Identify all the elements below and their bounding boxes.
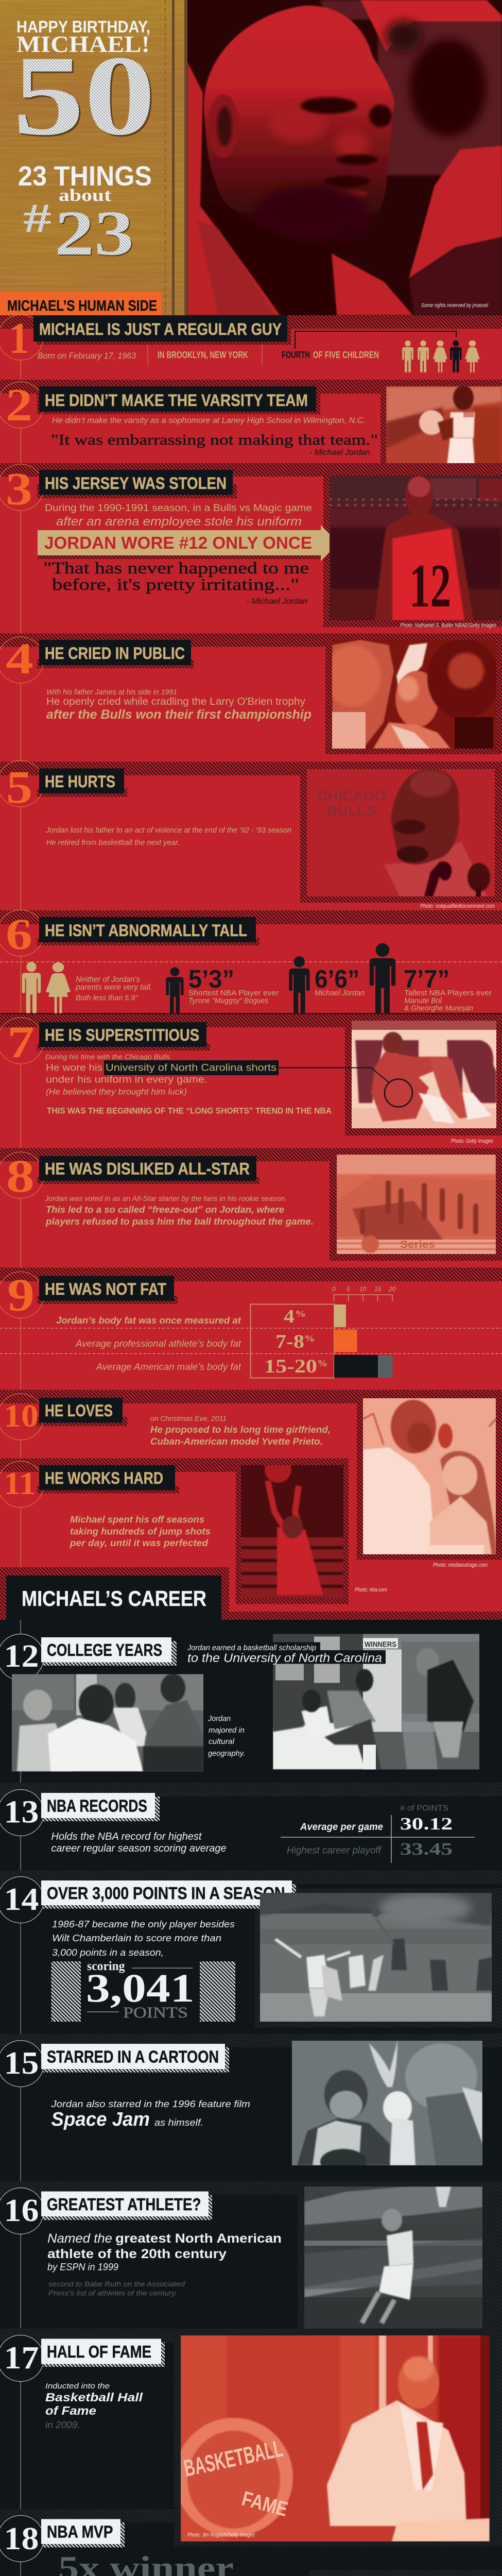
photo: Jordan in class xyxy=(12,1674,203,1771)
parents note: Both less than 5.9” xyxy=(76,993,138,1003)
number 15: 15 xyxy=(4,2046,39,2081)
height 6'6": Michael Jordan xyxy=(315,989,365,997)
title text: 50 xyxy=(13,32,155,159)
number 18: 18 xyxy=(4,2521,39,2556)
text: as himself. xyxy=(154,2117,203,2128)
photo: Jordan and Yvette Prieto xyxy=(363,1398,496,1554)
panel: fact 2 varsity xyxy=(0,380,502,467)
heading: GREATEST ATHLETE? xyxy=(47,2195,201,2214)
heading: HE WORKS HARD xyxy=(45,1469,163,1487)
background: red section xyxy=(0,309,502,1620)
panel: fact 4 cried xyxy=(0,634,502,754)
text: taking hundreds of jump shots xyxy=(70,1526,211,1536)
text: This led to a so called “freeze-out” on Jordan, where xyxy=(46,1205,284,1215)
photo: Jordan crying with trophy xyxy=(332,640,496,749)
panel: fact 13 records xyxy=(0,1783,502,1863)
title text: 50 xyxy=(14,34,157,161)
height 7'7": 7’7” xyxy=(404,965,449,993)
header xyxy=(0,0,502,315)
text: With his father James at his side in 1991 xyxy=(46,688,177,697)
birth facts: FOURTH xyxy=(282,350,310,360)
heading: HE DIDN’T MAKE THE VARSITY TEAM xyxy=(45,391,308,410)
text: second to Babe Ruth on the Associated xyxy=(48,2280,185,2288)
bar chart: body fat comparison: % xyxy=(317,1358,327,1368)
text: majored: geography. xyxy=(208,1749,245,1758)
text xyxy=(45,2382,143,2430)
title text: 23 xyxy=(56,199,135,269)
quote xyxy=(43,558,309,606)
number 1: 1 xyxy=(9,313,29,363)
heading: NBA MVP xyxy=(47,2522,113,2541)
panel: fact 15 cartoon xyxy=(0,2034,502,2175)
photo: Jordan at press conference: CHICAGO xyxy=(317,788,386,804)
text xyxy=(46,688,311,722)
heading xyxy=(39,386,316,412)
photo: Jordan at press conference xyxy=(307,769,495,896)
photo: Space Jam scene xyxy=(292,2041,482,2165)
panel: fact 9 body fat xyxy=(0,1267,502,1378)
bar chart: body fat comparison: Average American male’s body fat xyxy=(96,1362,241,1372)
text: career regular season scoring average xyxy=(51,1843,227,1854)
birth facts xyxy=(38,345,379,365)
panel: fact 17 hall of fame xyxy=(0,2329,502,2547)
text: of Fame xyxy=(45,2404,96,2417)
heading xyxy=(41,2519,125,2547)
heading xyxy=(41,1637,177,1666)
photo: Jordan hall of fame speech: BASKETBALL xyxy=(181,2435,285,2482)
photo: high school Jordan xyxy=(386,386,502,463)
text: During his time with the Chicago Bulls xyxy=(45,1053,170,1061)
heading xyxy=(39,917,256,942)
text: per day, until it was perfected xyxy=(70,1538,209,1548)
photo: Michael Jordan portrait xyxy=(187,0,502,315)
title text: about xyxy=(59,186,112,205)
panel: fact 10 loves xyxy=(0,1390,502,1568)
text: athlete of the 20th century xyxy=(47,2247,227,2261)
parents note: parents were very tall. xyxy=(75,983,152,992)
quote xyxy=(51,432,378,457)
text: Press's list of athletes of the century. xyxy=(48,2289,177,2297)
text: 3,000 points in a season, xyxy=(52,1947,164,1958)
text: University of North Carolina shorts xyxy=(106,1062,276,1074)
title text: MICHAEL! xyxy=(16,31,150,57)
heading xyxy=(41,2044,229,2072)
bar chart: body fat comparison: 5 xyxy=(347,1285,350,1293)
text xyxy=(45,1053,332,1116)
heading: HIS JERSEY WAS STOLEN xyxy=(45,474,227,493)
section tab: human side: MICHAEL’S HUMAN SIDE xyxy=(7,298,157,314)
text: He retired from basketball the next year. xyxy=(46,838,180,847)
quote: - Michael Jordan xyxy=(309,448,370,457)
text: Jordan was voted in as an All-Star starter by the fans in his rookie season. xyxy=(44,1194,287,1202)
photo: Jordan hall of fame speech: FAME xyxy=(239,2487,290,2521)
table: points: 30.12 xyxy=(400,1815,453,1834)
heading: COLLEGE YEARS xyxy=(47,1640,162,1659)
height 5'3": Tyrone "Muggsy" Bogues xyxy=(188,996,268,1005)
panel: fact 8 all-star xyxy=(0,1148,502,1261)
heading xyxy=(39,1022,206,1047)
birth facts: OF FIVE CHILDREN xyxy=(313,350,379,360)
photo credit: Some rights reserved by jmassel xyxy=(421,302,488,309)
section header: Michael's career: MICHAEL’S CAREER xyxy=(22,1586,206,1611)
panel: fact 6 height xyxy=(0,909,502,1014)
photo: All-Star game xyxy=(337,1155,496,1254)
heading xyxy=(41,2192,212,2220)
number 10: 10 xyxy=(4,1399,39,1434)
panel: fact 5 hurts xyxy=(0,760,502,909)
heading xyxy=(39,1276,174,1301)
heading: HE WAS DISLIKED ALL-STAR xyxy=(45,1159,250,1178)
text: (He believed they brought him luck) xyxy=(46,1087,187,1096)
text: He didn’t make the varsity as a sophomore at Laney High School in Wilmington, N.C. xyxy=(52,416,366,425)
photo: Jordan with coach xyxy=(273,1634,479,1769)
birth facts: IN BROOKLYN, NEW YORK xyxy=(158,350,248,360)
icon: five children xyxy=(402,341,480,372)
photo: Jordan wearing number 12 xyxy=(330,476,502,620)
heading xyxy=(39,769,124,793)
table: points: # of POINTS xyxy=(400,1804,448,1812)
number 6: 6 xyxy=(6,909,32,959)
quote: "It was embarrassing not making that team." xyxy=(51,432,378,448)
bar chart: body fat comparison: Average professional athlete’s body fat xyxy=(75,1338,241,1349)
panel: fact 11 works hard xyxy=(0,1456,387,1604)
text xyxy=(50,2099,250,2130)
text: on Christmas Eve, 2011 xyxy=(150,1414,227,1422)
text: after an arena employee stole his uniform xyxy=(56,515,302,529)
heading xyxy=(41,1793,160,1821)
text: 1986-87 became the only player besides xyxy=(52,1919,235,1929)
height 5'3": Shortest NBA Player ever xyxy=(188,989,279,997)
text: Jordan lost his father to an act of violence at the end of the ‘92 - ‘93 season xyxy=(45,826,291,835)
table: points: Highest career playoff xyxy=(287,1845,382,1856)
heading xyxy=(39,1465,175,1490)
wood title panel xyxy=(0,0,187,315)
table: points: 33.45 xyxy=(400,1840,453,1859)
heading: HALL OF FAME xyxy=(47,2342,151,2361)
photo: All-Star game: Series xyxy=(400,1239,435,1250)
bracket xyxy=(295,331,456,349)
title text: 23 xyxy=(55,198,134,268)
bar chart: body fat comparison: % xyxy=(304,1333,315,1344)
number 2: 2 xyxy=(6,380,32,431)
section tab: human side xyxy=(0,292,162,315)
height 7'7": Manute Bol xyxy=(404,996,442,1005)
photo credit: Photo: Getty Images xyxy=(451,1138,493,1144)
height chart: figures xyxy=(22,943,395,1014)
text: Michael spent his off seasons xyxy=(70,1515,204,1525)
arrow: Jordan wore #12 xyxy=(38,525,339,561)
text xyxy=(45,826,291,847)
text: During the 1990-1991 season, in a Bulls vs Magic game xyxy=(45,503,312,514)
callout: shorts highlight xyxy=(279,1067,412,1107)
title text: 23 THINGS xyxy=(18,161,152,192)
quote: - Michael Jordan xyxy=(247,597,307,606)
heading: OVER 3,000 POINTS IN A SEASON xyxy=(47,1884,285,1903)
quote: before, it's pretty irritating..." xyxy=(52,575,299,594)
photo credit: Photo: nba.com xyxy=(355,1587,387,1593)
photo: Jordan shooting vs Celtics xyxy=(260,1893,492,2022)
text xyxy=(70,1515,211,1548)
number 4: 4 xyxy=(6,634,33,683)
text xyxy=(44,1194,314,1227)
panel: fact 18 MVP xyxy=(0,2509,288,2576)
heading: HE WAS NOT FAT xyxy=(45,1280,166,1298)
height 5'3": 5’3” xyxy=(188,965,234,993)
heading xyxy=(33,315,287,342)
height 7'7": & Gheorghe Mureșan xyxy=(404,1004,473,1013)
heading: HE IS SUPERSTITIOUS xyxy=(45,1026,199,1044)
text: majored: cultural xyxy=(209,1737,235,1746)
photo: Jordan at press conference: BULLS xyxy=(327,803,376,819)
stat: 3,041 points: scoring xyxy=(87,1959,125,1973)
text: after the Bulls won their first championship xyxy=(46,707,311,722)
bar chart: body fat comparison: 15 xyxy=(374,1285,382,1293)
text: Inducted into the xyxy=(45,2382,110,2391)
panel: fact 1 regular guy xyxy=(0,313,502,372)
text: majored xyxy=(207,1715,245,1758)
stat: 3,041 points: POINTS xyxy=(123,2004,188,2021)
number 8: 8 xyxy=(6,1151,34,1202)
text: greatest North American xyxy=(115,2231,282,2246)
bar chart: body fat comparison xyxy=(0,1285,502,1378)
panel: fact 19 sports illustrated xyxy=(0,2570,502,2576)
text: players refused to pass him the ball throughout the game. xyxy=(45,1216,314,1227)
table: points xyxy=(281,1804,475,1863)
number 11: 11 xyxy=(4,1466,36,1501)
bar chart: body fat comparison: % xyxy=(295,1309,306,1319)
text: He wore his xyxy=(46,1062,102,1074)
bar chart: body fat comparison: 4 xyxy=(284,1306,295,1327)
birth facts: Born on February 17, 1963 xyxy=(38,351,136,361)
bar chart: body fat comparison: 15-20 xyxy=(264,1356,317,1377)
stat: 3,041 points xyxy=(51,1959,235,2022)
number 14: 14 xyxy=(4,1882,39,1917)
heading: MICHAEL IS JUST A REGULAR GUY xyxy=(39,320,282,338)
text xyxy=(52,1919,235,1958)
text: Named the xyxy=(47,2231,112,2246)
photo: Jordan wearing number 12: 12 xyxy=(409,551,451,620)
text: scholarship: Jordan earned a basketball scholarship xyxy=(187,1643,316,1652)
photo credit: Photo: mediaoutrage.com xyxy=(433,1562,488,1568)
bar chart: body fat comparison: 10 xyxy=(359,1285,367,1293)
background: career section xyxy=(0,1620,502,2576)
text: Cuban-American model Yvette Prieto. xyxy=(150,1436,323,1447)
panel: fact 12 college xyxy=(0,1634,479,1771)
photo credit: Photo: Jim Rogash/Getty Images xyxy=(187,2532,255,2538)
panel: fact 3 jersey xyxy=(0,463,502,629)
heading: NBA RECORDS xyxy=(47,1796,147,1816)
heading: HE CRIED IN PUBLIC xyxy=(45,644,185,663)
arrow: Jordan wore #12: JORDAN WORE #12 ONLY ONCE xyxy=(44,533,312,552)
heading xyxy=(39,1398,123,1423)
text: THIS WAS THE BEGINNING OF THE “LONG SHORTS” TREND IN THE NBA xyxy=(47,1106,332,1116)
heading: HE ISN’T ABNORMALLY TALL xyxy=(45,921,247,940)
height 7'7": Tallest NBA Players ever xyxy=(404,989,492,997)
number 13: 13 xyxy=(4,1795,39,1830)
text xyxy=(47,2231,282,2297)
number 16: 16 xyxy=(4,2193,39,2228)
text: He proposed to his long time girlfriend, xyxy=(150,1425,331,1435)
number 3: 3 xyxy=(6,464,32,515)
bar chart: body fat comparison: 7-8 xyxy=(275,1331,304,1352)
panel: fact 16 greatest athlete xyxy=(0,2181,502,2332)
title text xyxy=(13,18,157,269)
text xyxy=(45,503,312,529)
heading xyxy=(39,1156,256,1181)
height 7'7" xyxy=(404,965,492,1013)
text xyxy=(51,1831,227,1854)
panel: fact 14 3000 points xyxy=(0,1870,502,2027)
heading xyxy=(41,2339,165,2367)
number 17: 17 xyxy=(4,2341,39,2376)
heading: HE LOVES xyxy=(45,1401,113,1420)
heading xyxy=(39,640,191,665)
height 6'6": 6’6” xyxy=(315,965,359,993)
text: Basketball Hall xyxy=(45,2391,143,2404)
text: majored: Jordan xyxy=(207,1715,231,1723)
text: Jordan also starred in the 1996 feature film xyxy=(50,2099,250,2109)
timeline line: career and finances xyxy=(20,1620,21,2576)
number 12: 12 xyxy=(4,1639,39,1674)
bar chart: body fat comparison: 0 xyxy=(332,1285,336,1293)
title text: HAPPY BIRTHDAY, xyxy=(16,18,150,36)
text: Wilt Chamberlain to score more than xyxy=(52,1933,221,1943)
text xyxy=(150,1414,331,1447)
text: He openly cried while cradling the Larry O'Brien trophy xyxy=(46,696,305,707)
photo: Jordan sitting courtside xyxy=(352,1021,496,1128)
bar chart: body fat comparison: 20 xyxy=(388,1285,396,1293)
text: under his uniform in every game. xyxy=(46,1075,207,1085)
text: majored: majored in xyxy=(209,1726,245,1735)
photo: Jordan shooting in empty arena xyxy=(241,1465,343,1598)
text: in 2009. xyxy=(45,2420,80,2430)
parents note: Neither of Jordan's xyxy=(76,975,140,984)
text: Holds the NBA record for highest xyxy=(51,1831,202,1842)
height 5'3" xyxy=(188,965,279,1005)
text: Space Jam xyxy=(51,2109,150,2130)
timeline line: red section xyxy=(20,360,21,1577)
number 5: 5 xyxy=(6,762,32,813)
parents note xyxy=(75,975,152,1003)
table: points: Average per game xyxy=(300,1822,383,1833)
heading: STARRED IN A CARTOON xyxy=(47,2047,219,2066)
quote: "That has never happened to me xyxy=(43,558,309,577)
text: scholarship: to the University of North Carolina xyxy=(187,1651,382,1665)
photo: Jordan with coach: WINNERS xyxy=(365,1640,396,1649)
heading xyxy=(39,470,233,495)
photo: Jordan hall of fame speech xyxy=(181,2335,490,2541)
title text: # xyxy=(23,196,51,241)
photo: Jordan dunking xyxy=(304,2187,482,2329)
stat: 3,041 points: 3,041 xyxy=(86,1965,195,2010)
heading xyxy=(41,1880,296,1908)
section header: Michael's career xyxy=(0,1567,502,1620)
text: by ESPN in 1999 xyxy=(47,2262,118,2273)
heading: HE HURTS xyxy=(45,772,115,791)
panel: fact 7 superstitious xyxy=(0,1014,502,1144)
text: scholarship xyxy=(185,1642,386,1665)
bar chart: body fat comparison: Jordan’s body fat was once measured at xyxy=(56,1315,241,1326)
number 7: 7 xyxy=(7,1018,34,1067)
number 9: 9 xyxy=(7,1269,34,1321)
